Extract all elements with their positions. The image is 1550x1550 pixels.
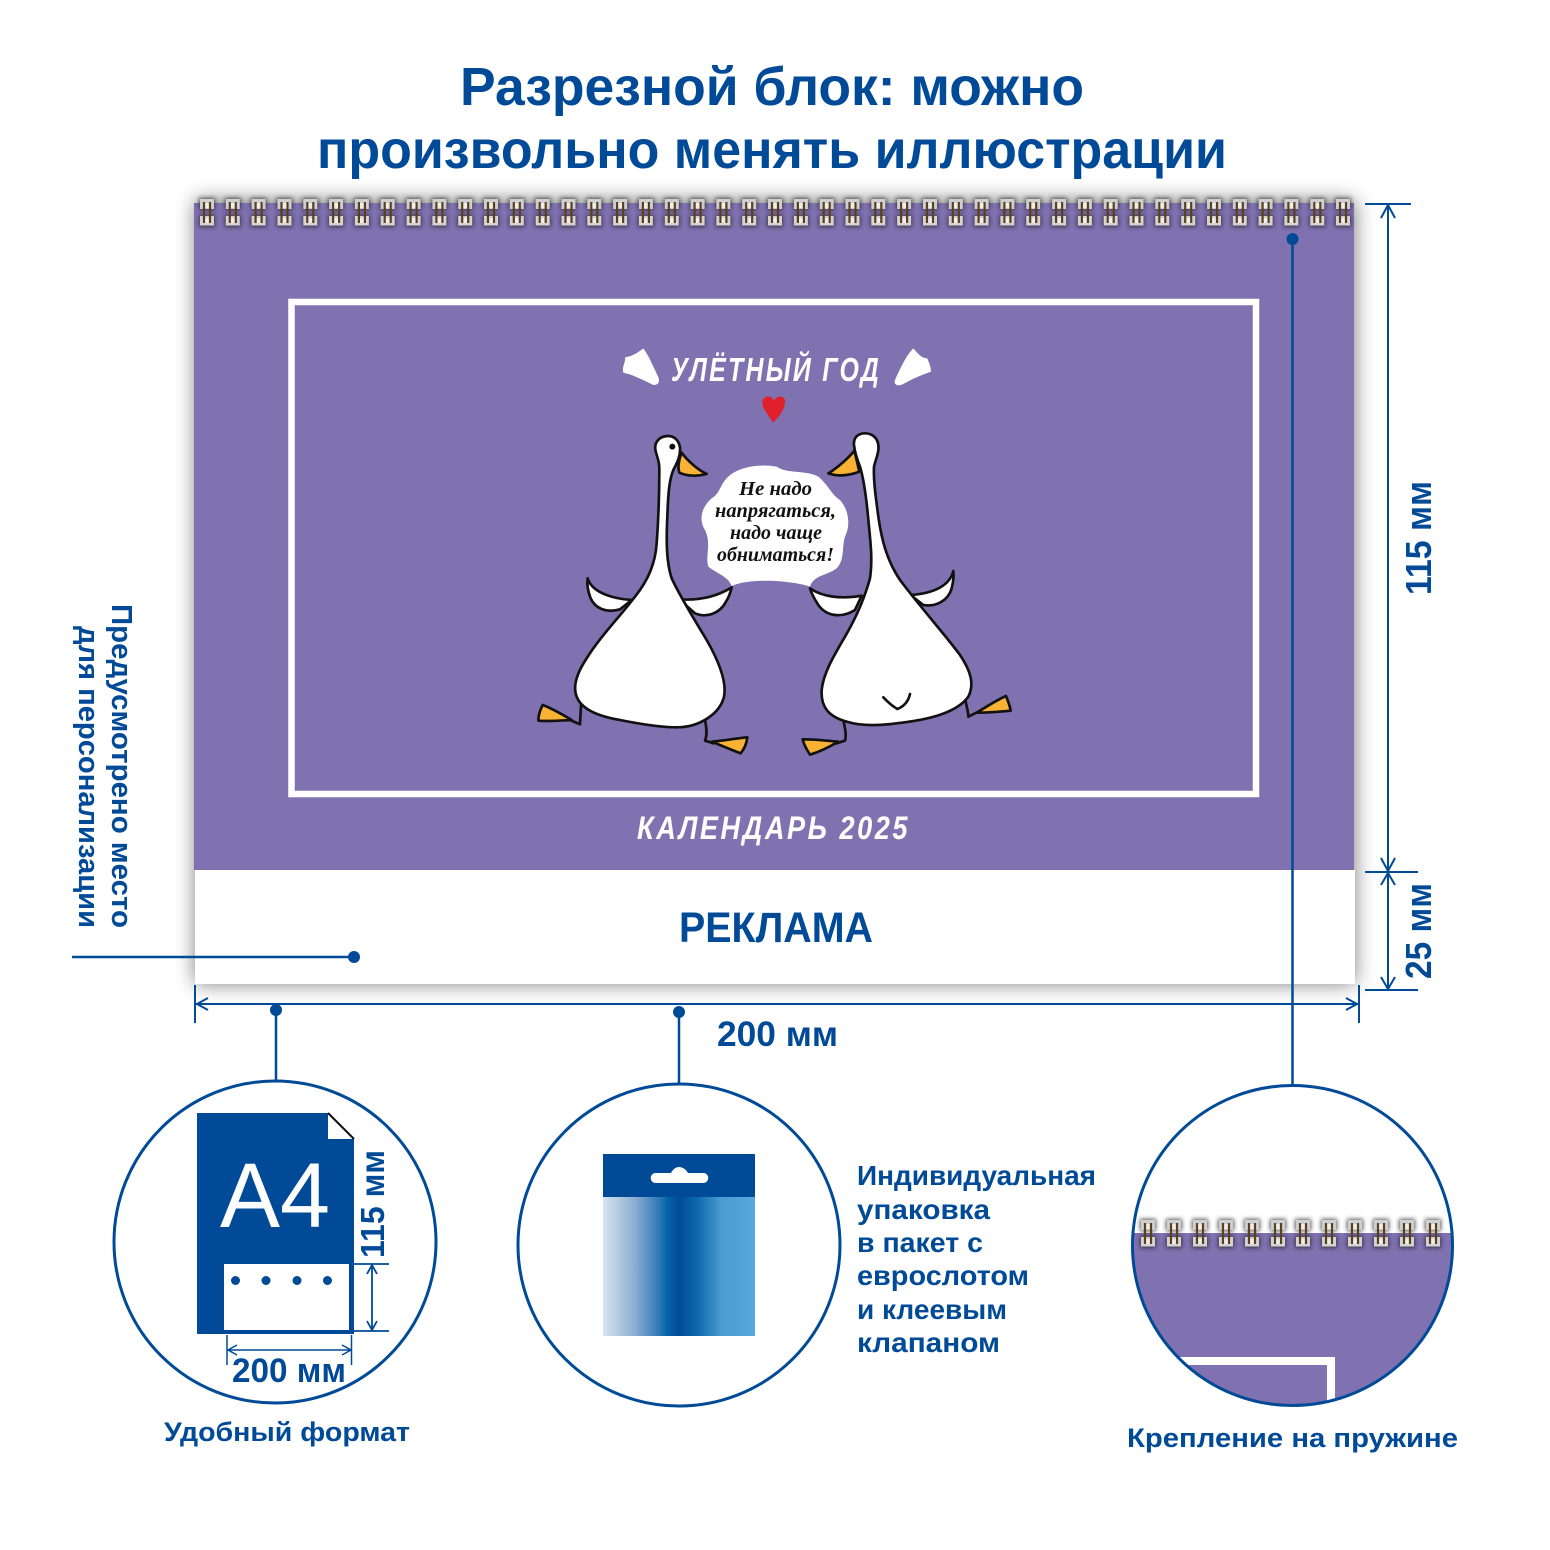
speech bubble text: надо чаще [730, 522, 822, 544]
dimension: height 115 mm [1365, 204, 1439, 872]
dimension: sheet height: 115 мм [354, 1150, 391, 1258]
dimension: height 25 mm [1365, 872, 1439, 990]
text: packaging description: Индивидуальная [857, 1160, 1096, 1191]
advertising label: РЕКЛАМА [679, 904, 873, 952]
connector: spiral circle [1286, 233, 1298, 1086]
cover heading: УЛЁТНЫЙ ГОД [671, 350, 881, 388]
icon: packaging bag [603, 1154, 755, 1336]
connector: packaging circle [673, 1006, 685, 1085]
title [317, 57, 1227, 180]
dimension: sheet width: 200 мм [232, 1352, 346, 1390]
calendar year label: КАЛЕНДАРЬ 2025 [637, 810, 910, 846]
panel: spiral detail circle [1131, 1084, 1454, 1407]
cover picture frame [292, 302, 1256, 794]
caption: format: Удобный формат [164, 1417, 410, 1447]
text: packaging description: упаковка [857, 1194, 990, 1225]
dimension: width 200 mm [195, 985, 1359, 1054]
callout: personalization: Предусмотрено место [105, 604, 137, 928]
caption: spiral: Крепление на пружине [1127, 1423, 1458, 1453]
title: произвольно менять иллюстрации [317, 120, 1227, 180]
calendar mockup [194, 198, 1355, 984]
text: packaging description: еврослотом [857, 1260, 1029, 1291]
text: packaging description: в пакет с [857, 1227, 983, 1258]
icon: heart [762, 397, 785, 423]
text: packaging description: и клеевым [857, 1294, 1007, 1325]
speech bubble text: Не надо [738, 478, 812, 500]
panel: format circle [114, 1081, 436, 1403]
icon: right goose foot [895, 348, 931, 385]
dimension: height 115 mm: 115 мм [1398, 481, 1439, 595]
spiral binding [199, 198, 1351, 227]
dimension: sheet width [227, 1335, 352, 1390]
illustration: geese with speech bubble [538, 348, 1011, 755]
speech bubble [702, 465, 848, 587]
text: packaging description: клапаном [857, 1327, 1000, 1358]
panel: packaging circle [518, 1084, 840, 1406]
speech bubble text: напрягаться, [715, 500, 836, 522]
right goose [803, 433, 1011, 755]
panel: calendar cover [194, 203, 1354, 870]
connector: format circle [270, 1004, 282, 1082]
text: packaging description [857, 1160, 1096, 1358]
dimension: height 25 mm: 25 мм [1398, 883, 1439, 979]
speech bubble text [715, 478, 836, 566]
icon: A4 sheet: A4 [220, 1145, 330, 1247]
icon: A4 sheet [197, 1113, 354, 1334]
dimension: width 200 mm: 200 мм [717, 1015, 838, 1054]
left goose [538, 436, 747, 753]
title: Разрезной блок: можно [460, 57, 1084, 117]
dimension: sheet height [354, 1150, 391, 1331]
speech bubble text: обниматься! [717, 544, 834, 566]
panel: advertising strip [195, 870, 1355, 984]
icon: left goose foot [623, 348, 659, 385]
callout: personalization: для персонализации [72, 626, 104, 928]
callout: personalization [72, 604, 360, 963]
